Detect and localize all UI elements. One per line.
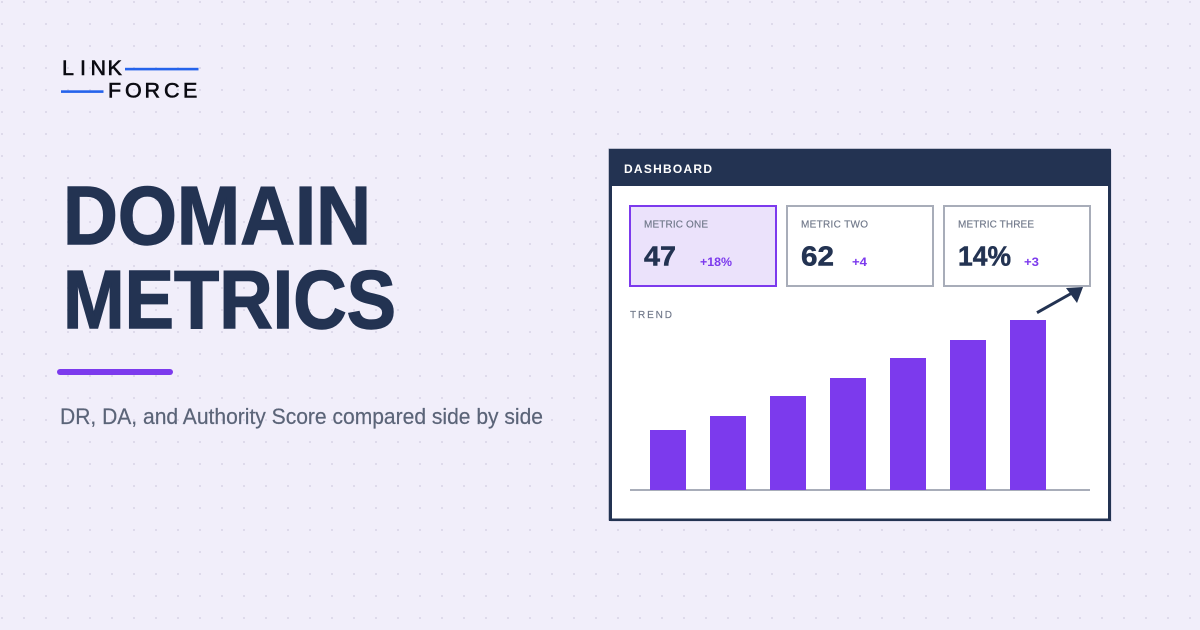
metric card: two: +4 <box>852 255 867 269</box>
metric card: one <box>630 206 776 286</box>
metric card: one: +18% <box>700 255 732 269</box>
metric card: three: 14% <box>958 241 1011 272</box>
bar chart: trend <box>630 320 1090 491</box>
dashboard header label: DASHBOARD <box>624 162 712 176</box>
metric card: three: +3 <box>1024 255 1039 269</box>
trend label: TREND <box>630 310 672 321</box>
metric card: two: 62 <box>801 241 834 272</box>
arrow: upward trend <box>1037 287 1083 313</box>
logo: Link Force: FORCE <box>108 78 197 102</box>
title <box>63 169 396 346</box>
title: METRICS <box>63 253 396 346</box>
metric card: two: METRIC TWO <box>801 220 868 230</box>
metric card: one: METRIC ONE <box>644 220 708 230</box>
metric card: three <box>944 206 1090 286</box>
metric card: one: 47 <box>644 241 676 272</box>
accent rule <box>57 369 173 375</box>
metric card: three: METRIC THREE <box>958 220 1034 230</box>
subtitle: DR, DA, and Authority Score compared side by side <box>60 404 543 429</box>
title: DOMAIN <box>63 169 371 262</box>
logo: Link Force: LINK <box>62 56 122 80</box>
panel: dashboard <box>608 148 1112 522</box>
logo: Link Force <box>61 56 198 102</box>
metric card: two <box>787 206 933 286</box>
